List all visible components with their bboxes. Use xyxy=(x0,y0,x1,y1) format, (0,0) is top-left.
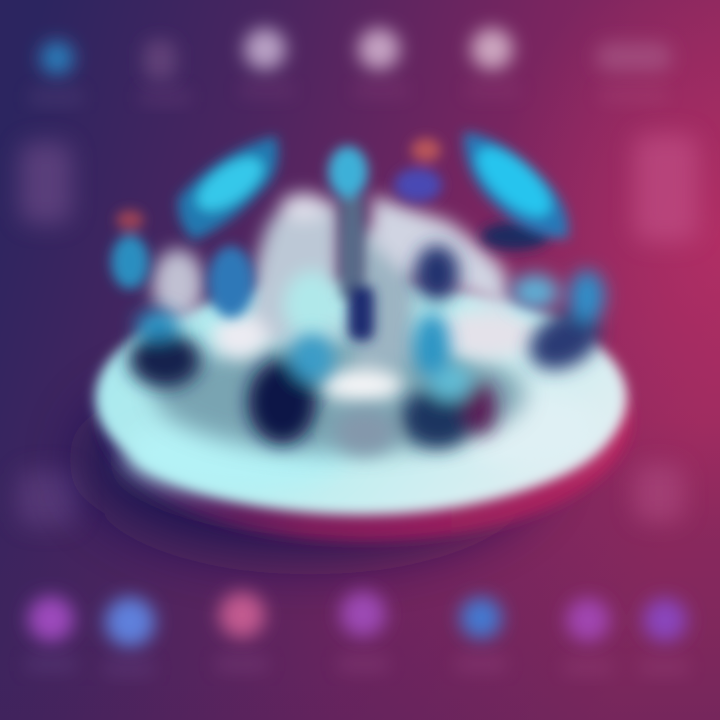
white ring structure xyxy=(152,193,537,401)
platform central shade xyxy=(155,337,525,453)
top row of icons xyxy=(40,28,672,80)
lower left text block xyxy=(18,470,78,526)
blue panel left xyxy=(178,136,278,240)
central machinery xyxy=(111,132,611,454)
left side text block xyxy=(20,142,72,224)
central tower xyxy=(328,146,374,341)
platform lower-left highlight xyxy=(125,419,345,491)
platform rim xyxy=(99,298,631,542)
top row captions xyxy=(30,84,666,104)
background bottom fade xyxy=(0,420,720,720)
platform xyxy=(95,281,631,542)
platform shadow xyxy=(85,365,535,555)
platform top xyxy=(95,281,627,515)
bottom row captions xyxy=(26,656,688,676)
lower right text block xyxy=(634,464,684,522)
bottom row of icons xyxy=(28,591,687,647)
figure top right of tower xyxy=(394,138,442,202)
blue panel right xyxy=(464,132,568,238)
left figure xyxy=(111,210,254,318)
dark shadow under right panel xyxy=(481,222,549,250)
right side text block xyxy=(634,134,698,242)
platform lower-right highlight xyxy=(460,392,600,468)
dark spheres xyxy=(129,245,611,454)
background right glow xyxy=(490,0,720,540)
